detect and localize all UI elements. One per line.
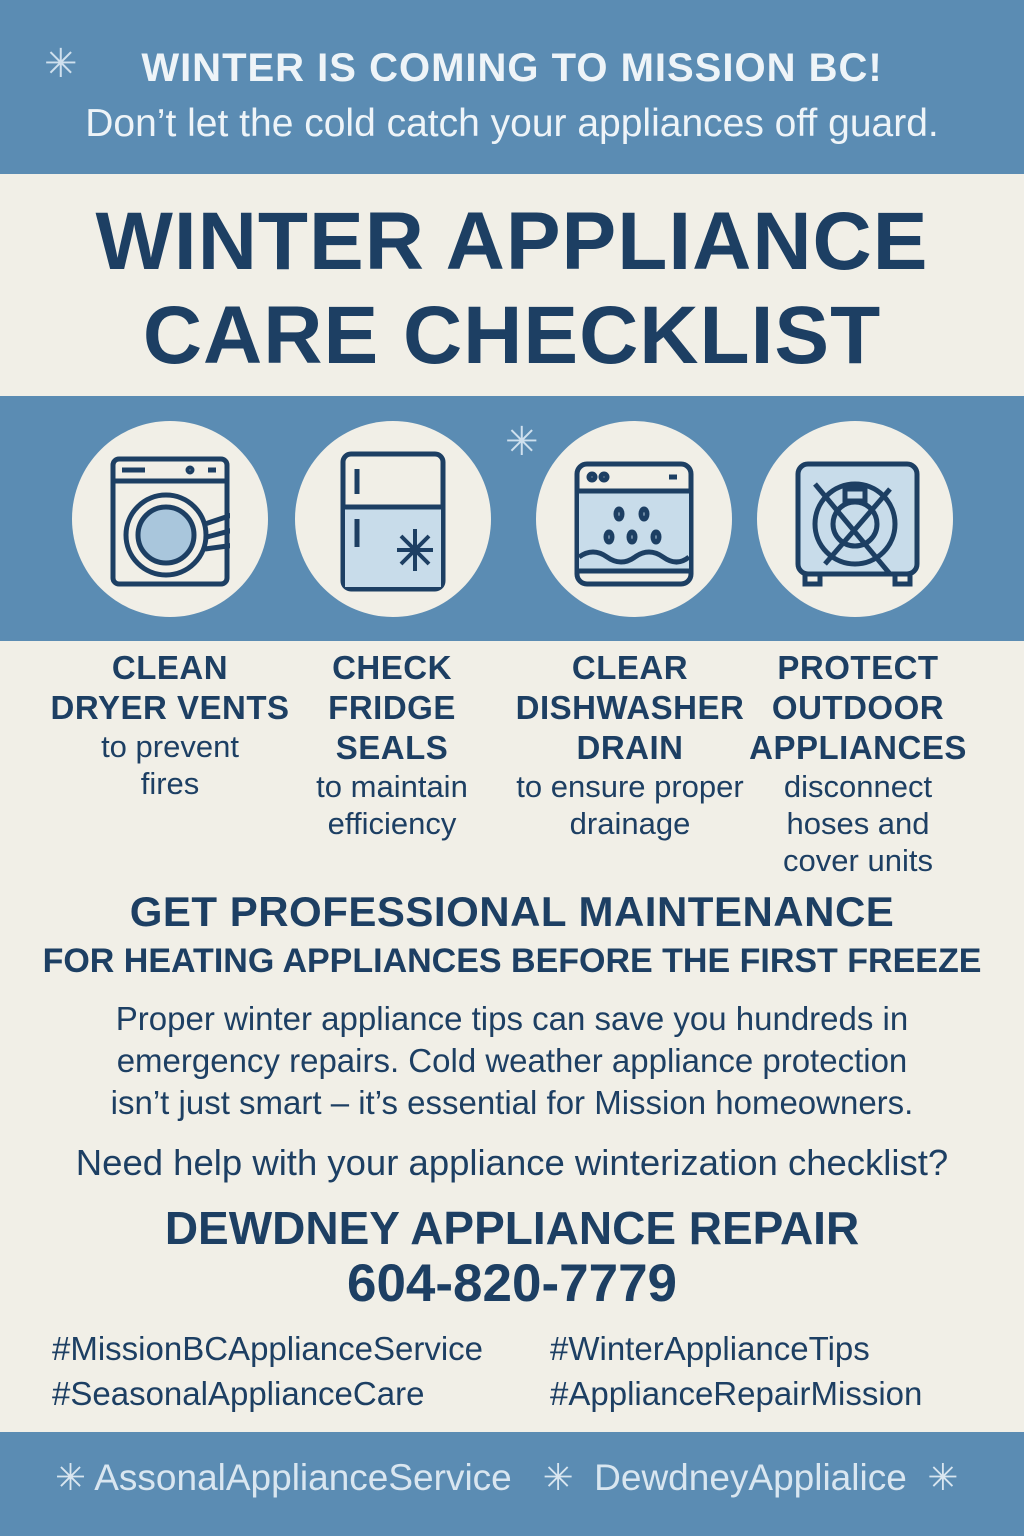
column: outdoor appliances: disconnect [784,769,932,804]
title: WINTER APPLIANCE [96,196,928,287]
icon: dishwasher [536,421,732,617]
icon: fridge [295,421,491,617]
professional maintenance heading: GET PROFESSIONAL MAINTENANCE [130,888,894,935]
top banner [0,0,1024,174]
column: dishwasher drain: DRAIN [576,729,684,766]
column: dryer vents: DRYER VENTS [50,689,289,726]
professional maintenance heading [43,888,981,980]
company and phone: 604-820-7779 [347,1254,677,1313]
icon: dryer [72,421,268,617]
text: #ApplianceRepairMission [550,1375,922,1412]
title: CARE CHECKLIST [143,290,881,381]
column: dryer vents: to prevent [101,729,239,764]
icon band [0,396,1024,641]
title [96,196,928,381]
body text: isn’t just smart – it’s essential for Mission homeowners. [111,1084,913,1121]
question: Need help with your appliance winterization checklist? [76,1142,948,1183]
column: dishwasher drain: drainage [570,806,690,841]
column: dishwasher drain: DISHWASHER [516,689,744,726]
column: fridge seals: CHECK [332,649,452,686]
hashtags [52,1330,922,1412]
banner subheading: Don’t let the cold catch your appliances off guard. [85,102,939,145]
icon: snowflake band: ✳ [505,420,539,464]
column: outdoor appliances: cover units [783,843,933,878]
professional maintenance heading: FOR HEATING APPLIANCES BEFORE THE FIRST FREEZE [43,942,981,980]
body text: Proper winter appliance tips can save you hundreds in [116,1000,908,1037]
footer text: ✳ AssonalApplianceService ✳ DewdneyApplialice ✳ [55,1457,958,1498]
column: outdoor appliances: OUTDOOR [772,689,944,726]
column: dryer vents [50,649,289,801]
column: dryer vents: fires [141,766,199,801]
column: fridge seals: to maintain [316,769,468,804]
company and phone: DEWDNEY APPLIANCE REPAIR [165,1202,859,1254]
icon: outdoor unit [757,421,953,617]
column: outdoor appliances: APPLIANCES [749,729,967,766]
column: outdoor appliances [749,649,967,878]
column: fridge seals: SEALS [336,729,448,766]
footer band [0,1432,1024,1536]
column: dishwasher drain: to ensure proper [516,769,744,804]
text: #MissionBCApplianceService [52,1330,483,1367]
body text: emergency repairs. Cold weather appliance protection [117,1042,907,1079]
column: dishwasher drain [516,649,744,841]
column: outdoor appliances: hoses and [786,806,930,841]
column: dryer vents: CLEAN [112,649,228,686]
company and phone [165,1202,859,1313]
column: fridge seals: FRIDGE [328,689,456,726]
body text [111,1000,913,1121]
column: outdoor appliances: PROTECT [777,649,939,686]
icon: snowflake left: ✳ [44,42,78,86]
text: #WinterApplianceTips [550,1330,870,1367]
banner heading: WINTER IS COMING TO MISSION BC! [141,46,883,90]
text: #SeasonalApplianceCare [52,1375,424,1412]
column: dishwasher drain: CLEAR [572,649,688,686]
column: fridge seals: efficiency [328,806,456,841]
column: fridge seals [316,649,468,841]
